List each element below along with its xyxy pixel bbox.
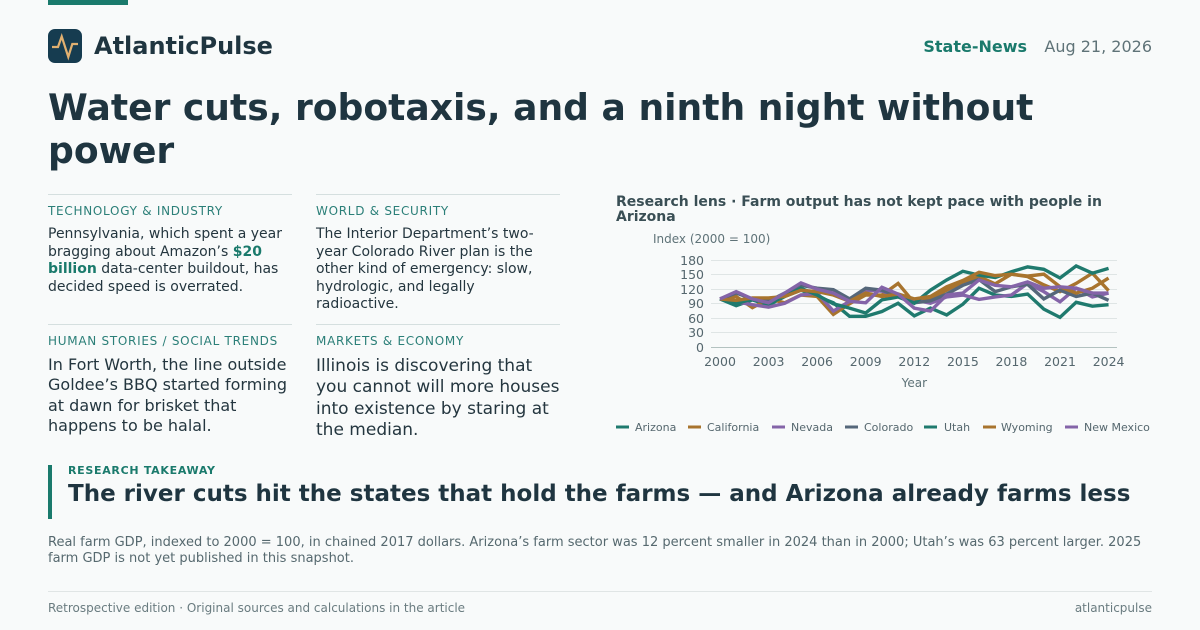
story text: happens to be halal. bbox=[48, 416, 212, 435]
x axis title: Year bbox=[901, 376, 927, 390]
story text: the median. bbox=[316, 420, 418, 440]
title: power bbox=[48, 130, 174, 172]
series: Nevada bbox=[720, 283, 1109, 311]
callout headline: The river cuts hit the states that hold the farms — and Arizona already farms less bbox=[68, 481, 1130, 507]
title: Water cuts, robotaxis, and a ninth night without bbox=[48, 87, 1033, 129]
y axis title: Index (2000 = 100) bbox=[653, 232, 770, 246]
x axis labels bbox=[704, 354, 1125, 369]
story text bbox=[316, 356, 559, 440]
kicker: WORLD & SECURITY bbox=[316, 204, 449, 218]
panel: human stories story bbox=[48, 324, 292, 441]
kicker: HUMAN STORIES / SOCIAL TRENDS bbox=[48, 334, 278, 348]
footer right: atlanticpulse bbox=[1075, 601, 1152, 615]
story text bbox=[316, 226, 534, 312]
story text: Illinois is discovering that bbox=[316, 356, 532, 376]
legend: California bbox=[707, 421, 759, 434]
legend: Wyoming bbox=[1001, 421, 1053, 434]
series: New Mexico bbox=[720, 280, 1109, 311]
footnote bbox=[48, 535, 1141, 566]
chart heading: Arizona bbox=[616, 209, 676, 225]
data lines bbox=[720, 266, 1109, 317]
y axis labels: 0 bbox=[696, 340, 704, 355]
x axis labels: 2012 bbox=[898, 354, 930, 369]
story text: into existence by staring at bbox=[316, 399, 549, 419]
series: Utah bbox=[720, 266, 1109, 313]
x axis labels: 2018 bbox=[995, 354, 1027, 369]
legend bbox=[616, 421, 1150, 434]
footnote: farm GDP is not yet published in this snapshot. bbox=[48, 551, 354, 566]
legend: Colorado bbox=[864, 421, 913, 434]
story text bbox=[48, 355, 287, 435]
story text: hydrologic, and legally bbox=[316, 279, 475, 295]
x axis labels: 2009 bbox=[850, 354, 882, 369]
legend: Nevada bbox=[791, 421, 833, 434]
y axis labels: 30 bbox=[688, 325, 704, 340]
story text: at dawn for brisket that bbox=[48, 396, 236, 415]
callout: research takeaway bbox=[48, 464, 1130, 519]
story text: radioactive. bbox=[316, 296, 399, 312]
x axis labels: 2003 bbox=[753, 354, 785, 369]
y axis labels: 60 bbox=[688, 311, 704, 326]
x axis labels: 2000 bbox=[704, 354, 736, 369]
y axis labels: 120 bbox=[680, 282, 704, 297]
story text bbox=[48, 226, 282, 295]
footer left: Retrospective edition · Original sources and calculations in the article bbox=[48, 601, 465, 615]
y axis labels bbox=[680, 253, 704, 355]
story text: you cannot will more houses bbox=[316, 377, 559, 397]
legend: Utah bbox=[944, 421, 970, 434]
story text: The Interior Department’s two- bbox=[316, 226, 534, 242]
legend: New Mexico bbox=[1084, 421, 1150, 434]
date: Aug 21, 2026 bbox=[1044, 37, 1152, 56]
x axis labels: 2024 bbox=[1093, 354, 1125, 369]
y axis labels: 90 bbox=[688, 296, 704, 311]
x axis labels: 2015 bbox=[947, 354, 979, 369]
kicker: MARKETS & ECONOMY bbox=[316, 334, 464, 348]
story text: Pennsylvania, which spent a year bbox=[48, 226, 282, 242]
grid lines bbox=[711, 260, 1117, 332]
panel: world and security story bbox=[316, 194, 560, 315]
story text: other kind of emergency: slow, bbox=[316, 261, 532, 277]
footnote: Real farm GDP, indexed to 2000 = 100, in chained 2017 dollars. Arizona’s farm sector was 12 percent smaller in 2024 than in 2000; Utah’s was 63 percent larger. 2025 bbox=[48, 535, 1141, 550]
chart heading: Research lens · Farm output has not kept pace with people in bbox=[616, 194, 1102, 210]
y axis labels: 180 bbox=[680, 253, 704, 268]
x axis labels: 2021 bbox=[1044, 354, 1076, 369]
title bbox=[48, 87, 1033, 172]
top accent bar bbox=[48, 0, 128, 5]
line chart: farm GDP index by state bbox=[616, 232, 1150, 434]
panel: markets and economy story bbox=[316, 324, 560, 441]
story text: year Colorado River plan is the bbox=[316, 244, 533, 260]
icon: pulse logo bbox=[48, 29, 82, 63]
story text: Goldee’s BBQ started forming bbox=[48, 375, 287, 394]
panel: technology and industry story bbox=[48, 194, 292, 315]
section tag: State-News bbox=[923, 37, 1027, 56]
callout label: RESEARCH TAKEAWAY bbox=[68, 464, 216, 477]
chart heading bbox=[616, 194, 1102, 225]
series: Arizona bbox=[720, 288, 1109, 317]
callout bar bbox=[48, 465, 52, 519]
y axis labels: 150 bbox=[680, 267, 704, 282]
series: Wyoming bbox=[720, 272, 1109, 301]
legend: Arizona bbox=[635, 421, 676, 434]
kicker: TECHNOLOGY & INDUSTRY bbox=[48, 204, 223, 218]
x axis labels: 2006 bbox=[801, 354, 833, 369]
brand name: AtlanticPulse bbox=[94, 32, 273, 60]
series: Colorado bbox=[720, 280, 1109, 303]
story text: In Fort Worth, the line outside bbox=[48, 355, 286, 374]
story text: decided speed is overrated. bbox=[48, 279, 243, 295]
story text: bragging about Amazon’s $20 bbox=[48, 244, 262, 260]
story text: billion data-center buildout, has bbox=[48, 261, 278, 277]
series: California bbox=[720, 273, 1109, 314]
